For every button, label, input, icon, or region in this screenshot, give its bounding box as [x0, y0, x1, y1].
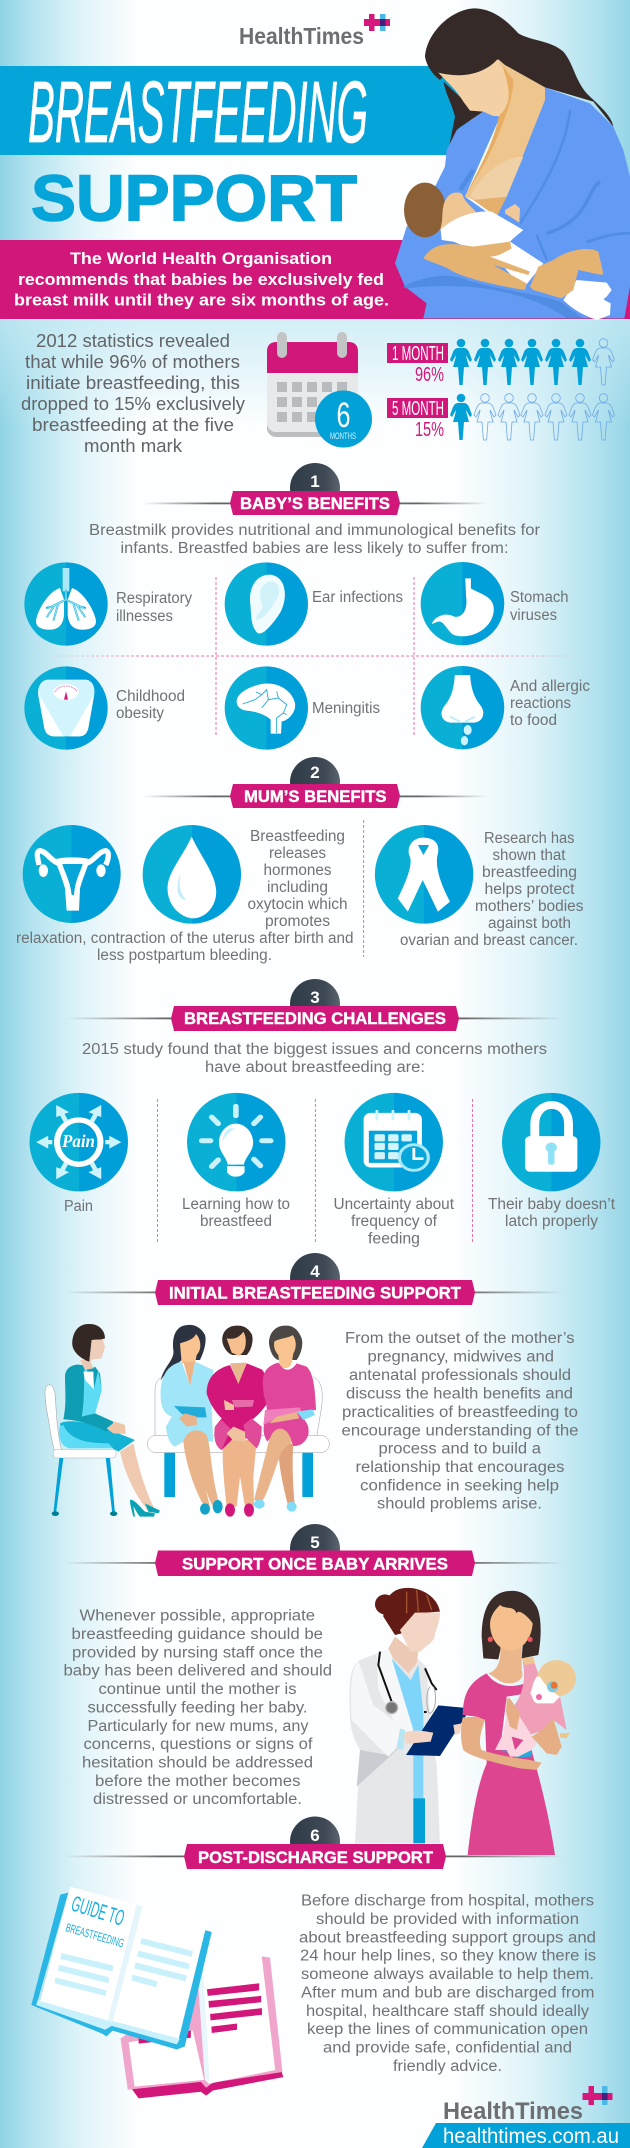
- figure: bench: [147, 1377, 329, 1497]
- text: oxytocin: relaxation, contraction of the uterus after birth and: [16, 930, 354, 947]
- icon: pain: [30, 1093, 128, 1191]
- intro text: baby's benefits: [89, 522, 540, 557]
- text: cancer protection: helps protect: [484, 881, 575, 898]
- heading 2: mum's benefits: [143, 757, 488, 808]
- paragraph: post-discharge: [299, 1892, 596, 2075]
- labels: baby's benefits: Stomach: [510, 589, 568, 606]
- heading 5: support once baby arrives: [64, 1524, 564, 1576]
- statistics text: breastfeeding at the five: [32, 415, 234, 435]
- icon: milk drop: [143, 825, 241, 924]
- WHO recommendation banner: recommends that babies be exclusively fed: [18, 270, 384, 289]
- intro text: baby's benefits: Breastmilk provides nutritional and immunological benefits for: [89, 522, 540, 539]
- text: cancer protection: against both: [488, 915, 571, 932]
- labels: baby's benefits: reactions: [510, 695, 571, 712]
- paragraph: initial support: [342, 1330, 578, 1512]
- paragraph: post-discharge: After mum and bub are discharged from: [301, 1984, 594, 2002]
- figure: woman in pink: [254, 1326, 316, 1512]
- icon: calendar 6 months: 6: [336, 396, 350, 435]
- icon: ear: [225, 562, 308, 646]
- pictogram: 5 month 15%: 5 MONTH: [392, 398, 444, 420]
- heading 3: breastfeeding challenges: 3: [310, 988, 320, 1007]
- logo: HealthTimes top: [239, 14, 390, 49]
- statistics text: that while 96% of mothers: [25, 352, 240, 372]
- labels: baby's benefits: Respiratory: [116, 590, 192, 607]
- statistics text: initiate breastfeeding, this: [26, 373, 240, 393]
- intro text: challenges: 2015 study found that the biggest issues and concerns mothers: [82, 1041, 547, 1058]
- paragraph: once baby arrives: breastfeeding guidance should be: [72, 1626, 323, 1643]
- text: oxytocin: promotes: [265, 913, 330, 930]
- heading 2: mum's benefits: MUM’S BENEFITS: [244, 787, 386, 806]
- pictogram: 1 month 96%: 1 MONTH: [392, 343, 444, 365]
- heading 4: initial breastfeeding support: [64, 1253, 564, 1305]
- paragraph: initial support: confidence in seeking help: [360, 1478, 559, 1494]
- heading 1: baby's benefits: BABY’S BENEFITS: [240, 494, 390, 513]
- illustration: nurse and mother with baby: [349, 1588, 576, 1855]
- icon: uterus: [23, 825, 121, 923]
- paragraph: initial support: practicalities of breastfeeding to: [342, 1404, 578, 1421]
- WHO recommendation banner: breast milk until they are six months of age.: [14, 290, 389, 310]
- paragraph: initial support: From the outset of the mother’s: [345, 1330, 575, 1347]
- heading 5: support once baby arrives: SUPPORT ONCE BABY ARRIVES: [182, 1554, 448, 1574]
- paragraph: initial support: antenatal professionals should: [349, 1367, 571, 1384]
- heading 6: post-discharge support: [64, 1816, 564, 1869]
- book text: guide to breastfeeding: GUIDE TO: [69, 1891, 127, 1931]
- footer band: website: healthtimes.com.au: [443, 2125, 619, 2148]
- text: oxytocin: hormones: [264, 862, 332, 879]
- logo: HealthTimes top: HealthTimes: [239, 23, 364, 49]
- text: cancer protection: Research has: [484, 830, 575, 847]
- text: oxytocin: Breastfeeding: [250, 828, 345, 845]
- paragraph: once baby arrives: distressed or uncomfortable.: [93, 1791, 302, 1808]
- icon: padlock: [502, 1093, 600, 1191]
- labels: baby's benefits: Childhood: [116, 688, 185, 705]
- labels: challenges: latch properly: [505, 1213, 598, 1230]
- paragraph: initial support: relationship that encourages: [356, 1459, 565, 1476]
- paragraph: initial support: pregnancy, midwives and: [368, 1348, 554, 1366]
- text: oxytocin: including: [267, 879, 328, 896]
- icons: drop, ribbon: [143, 825, 473, 924]
- icon text: Pain: Pain: [61, 1131, 95, 1151]
- text: oxytocin: releases: [269, 845, 326, 862]
- paragraph: post-discharge: hospital, healthcare staff should ideally: [306, 2003, 589, 2020]
- paragraph: post-discharge: friendly advice.: [393, 2058, 502, 2075]
- paragraph: post-discharge: keep the lines of communication open: [307, 2021, 588, 2038]
- paragraph: once baby arrives: hesitation should be addressed: [82, 1754, 313, 1772]
- book text: guide to breastfeeding: BREASTFEEDING: [64, 1920, 126, 1950]
- text: cancer protection: ovarian and breast cancer.: [400, 932, 578, 949]
- pictogram: 5 month 15%: [387, 394, 614, 441]
- icon: stomach: [421, 562, 504, 645]
- heading 3: breastfeeding challenges: [66, 979, 562, 1031]
- icons: challenges: [30, 1093, 600, 1191]
- paragraph: initial support: should problems arise.: [377, 1496, 542, 1512]
- text: cancer protection: mothers’ bodies: [475, 898, 584, 915]
- icon: brain: [225, 666, 308, 750]
- pictogram: 1 month 96%: [387, 339, 614, 386]
- paragraph: once baby arrives: baby has been delivered and should: [64, 1662, 332, 1680]
- labels: baby's benefits: to food: [510, 712, 557, 729]
- labels: baby's benefits: And allergic: [510, 678, 590, 695]
- paragraph: post-discharge: 24 hour help lines, so they know there is: [300, 1948, 596, 1964]
- intro text: challenges: [82, 1041, 547, 1076]
- labels: challenges: [64, 1196, 616, 1248]
- labels: challenges: feeding: [368, 1230, 420, 1248]
- icon: calendar 6 months: MONTHS: [330, 431, 356, 441]
- labels: baby's benefits: obesity: [116, 705, 164, 722]
- intro text: challenges: have about breastfeeding are:: [205, 1059, 425, 1076]
- icon: calendar 6 months: [267, 332, 372, 448]
- figure: seated professional: [45, 1324, 160, 1517]
- dashed grid: baby's benefits: [46, 577, 583, 737]
- statistics text: 2012 statistics revealed: [36, 331, 230, 351]
- labels: baby's benefits: [116, 589, 590, 729]
- statistics text: dropped to 15% exclusively: [21, 394, 245, 414]
- icons: lungs, ear, scale, brain: [24, 562, 308, 750]
- paragraph: once baby arrives: concerns, questions or signs of: [84, 1736, 313, 1753]
- heading 3: breastfeeding challenges: BREASTFEEDING CHALLENGES: [184, 1009, 446, 1028]
- statistics text: [21, 331, 245, 456]
- paragraph: once baby arrives: continue until the mother is: [98, 1681, 297, 1698]
- labels: challenges: breastfeed: [200, 1213, 272, 1230]
- heading 6: post-discharge support: 6: [310, 1826, 320, 1845]
- logo: HealthTimes bottom: HealthTimes: [443, 2098, 583, 2125]
- figure: pink book: [121, 1952, 283, 2098]
- heading 5: support once baby arrives: 5: [310, 1533, 320, 1552]
- paragraph: once baby arrives: successfully feeding her baby.: [88, 1700, 308, 1716]
- heading 1: baby's benefits: [143, 463, 488, 515]
- figure: woman in magenta: [207, 1326, 269, 1517]
- paragraph: once baby arrives: [64, 1608, 332, 1808]
- pictogram: 1 month 96%: 96%: [415, 364, 444, 386]
- icon: scale: [24, 666, 108, 750]
- illustration: mother breastfeeding: [395, 8, 630, 320]
- paragraph: post-discharge: and provide safe, confidential and: [323, 2040, 572, 2056]
- text: cancer protection: shown that: [492, 847, 566, 864]
- paragraph: post-discharge: Before discharge from hospital, mothers: [301, 1892, 594, 1910]
- heading 4: initial breastfeeding support: INITIAL BREASTFEEDING SUPPORT: [169, 1284, 462, 1302]
- paragraph: once baby arrives: provided by nursing staff once the: [72, 1644, 323, 1662]
- figure: mother holding baby: [461, 1591, 576, 1855]
- paragraph: once baby arrives: Particularly for new mums, any: [88, 1718, 309, 1735]
- labels: challenges: frequency of: [351, 1213, 438, 1230]
- logo: HealthTimes bottom: [443, 2086, 612, 2125]
- WHO recommendation banner: [0, 240, 630, 319]
- labels: baby's benefits: Meningitis: [312, 700, 380, 717]
- paragraph: once baby arrives: Whenever possible, appropriate: [80, 1608, 315, 1624]
- paragraph: post-discharge: someone always available to help them.: [301, 1966, 594, 1983]
- labels: baby's benefits: Ear infections: [312, 589, 403, 606]
- text: oxytocin: less postpartum bleeding.: [97, 947, 272, 964]
- labels: baby's benefits: illnesses: [116, 608, 173, 625]
- paragraph: once baby arrives: before the mother becomes: [95, 1773, 301, 1790]
- figure: woman in light blue: [161, 1325, 223, 1515]
- title: SUPPORT: SUPPORT: [31, 162, 357, 234]
- paragraph: initial support: process and to build a: [378, 1440, 541, 1458]
- icon: nose: [421, 666, 504, 749]
- illustration: women in waiting room: [45, 1324, 329, 1517]
- paragraph: initial support: discuss the health benefits and: [346, 1386, 573, 1402]
- paragraph: initial support: encourage understanding of the: [342, 1422, 578, 1440]
- dividers: challenges: [158, 1099, 472, 1243]
- text: oxytocin: [16, 828, 354, 964]
- statistics text: month mark: [84, 436, 183, 456]
- paragraph: post-discharge: should be provided with information: [316, 1911, 579, 1928]
- intro text: baby's benefits: infants. Breastfed babies are less likely to suffer from:: [120, 540, 508, 557]
- labels: baby's benefits: viruses: [510, 607, 557, 624]
- WHO recommendation banner: The World Health Organisation: [70, 249, 332, 268]
- illustration: guide books: [31, 1887, 283, 2098]
- book text: guide to breastfeeding: [64, 1891, 127, 1950]
- labels: challenges: Pain: [64, 1198, 93, 1215]
- paragraph: post-discharge: about breastfeeding support groups and: [299, 1930, 596, 1946]
- heading 6: post-discharge support: POST-DISCHARGE SUPPORT: [198, 1848, 434, 1867]
- figure: nurse: [349, 1588, 471, 1843]
- labels: challenges: Uncertainty about: [334, 1196, 455, 1213]
- heading 2: mum's benefits: 2: [310, 763, 320, 782]
- labels: challenges: Their baby doesn’t: [488, 1196, 616, 1213]
- icon: awareness ribbon: [375, 825, 473, 924]
- icons: stomach, nose: [421, 562, 504, 749]
- text: oxytocin: oxytocin which: [248, 896, 348, 913]
- figure: blue book: [31, 1887, 212, 2050]
- text: cancer protection: [400, 830, 584, 949]
- divider: mum's benefits: [363, 820, 365, 957]
- pictogram: 5 month 15%: 15%: [415, 419, 444, 441]
- heading 4: initial breastfeeding support: 4: [310, 1262, 320, 1281]
- heading 1: baby's benefits: 1: [310, 472, 320, 491]
- text: cancer protection: breastfeeding: [482, 864, 577, 881]
- labels: challenges: Learning how to: [182, 1196, 290, 1213]
- icon: calendar clock: [345, 1093, 443, 1191]
- icon: lungs: [24, 562, 108, 646]
- icon: light bulb: [187, 1093, 285, 1191]
